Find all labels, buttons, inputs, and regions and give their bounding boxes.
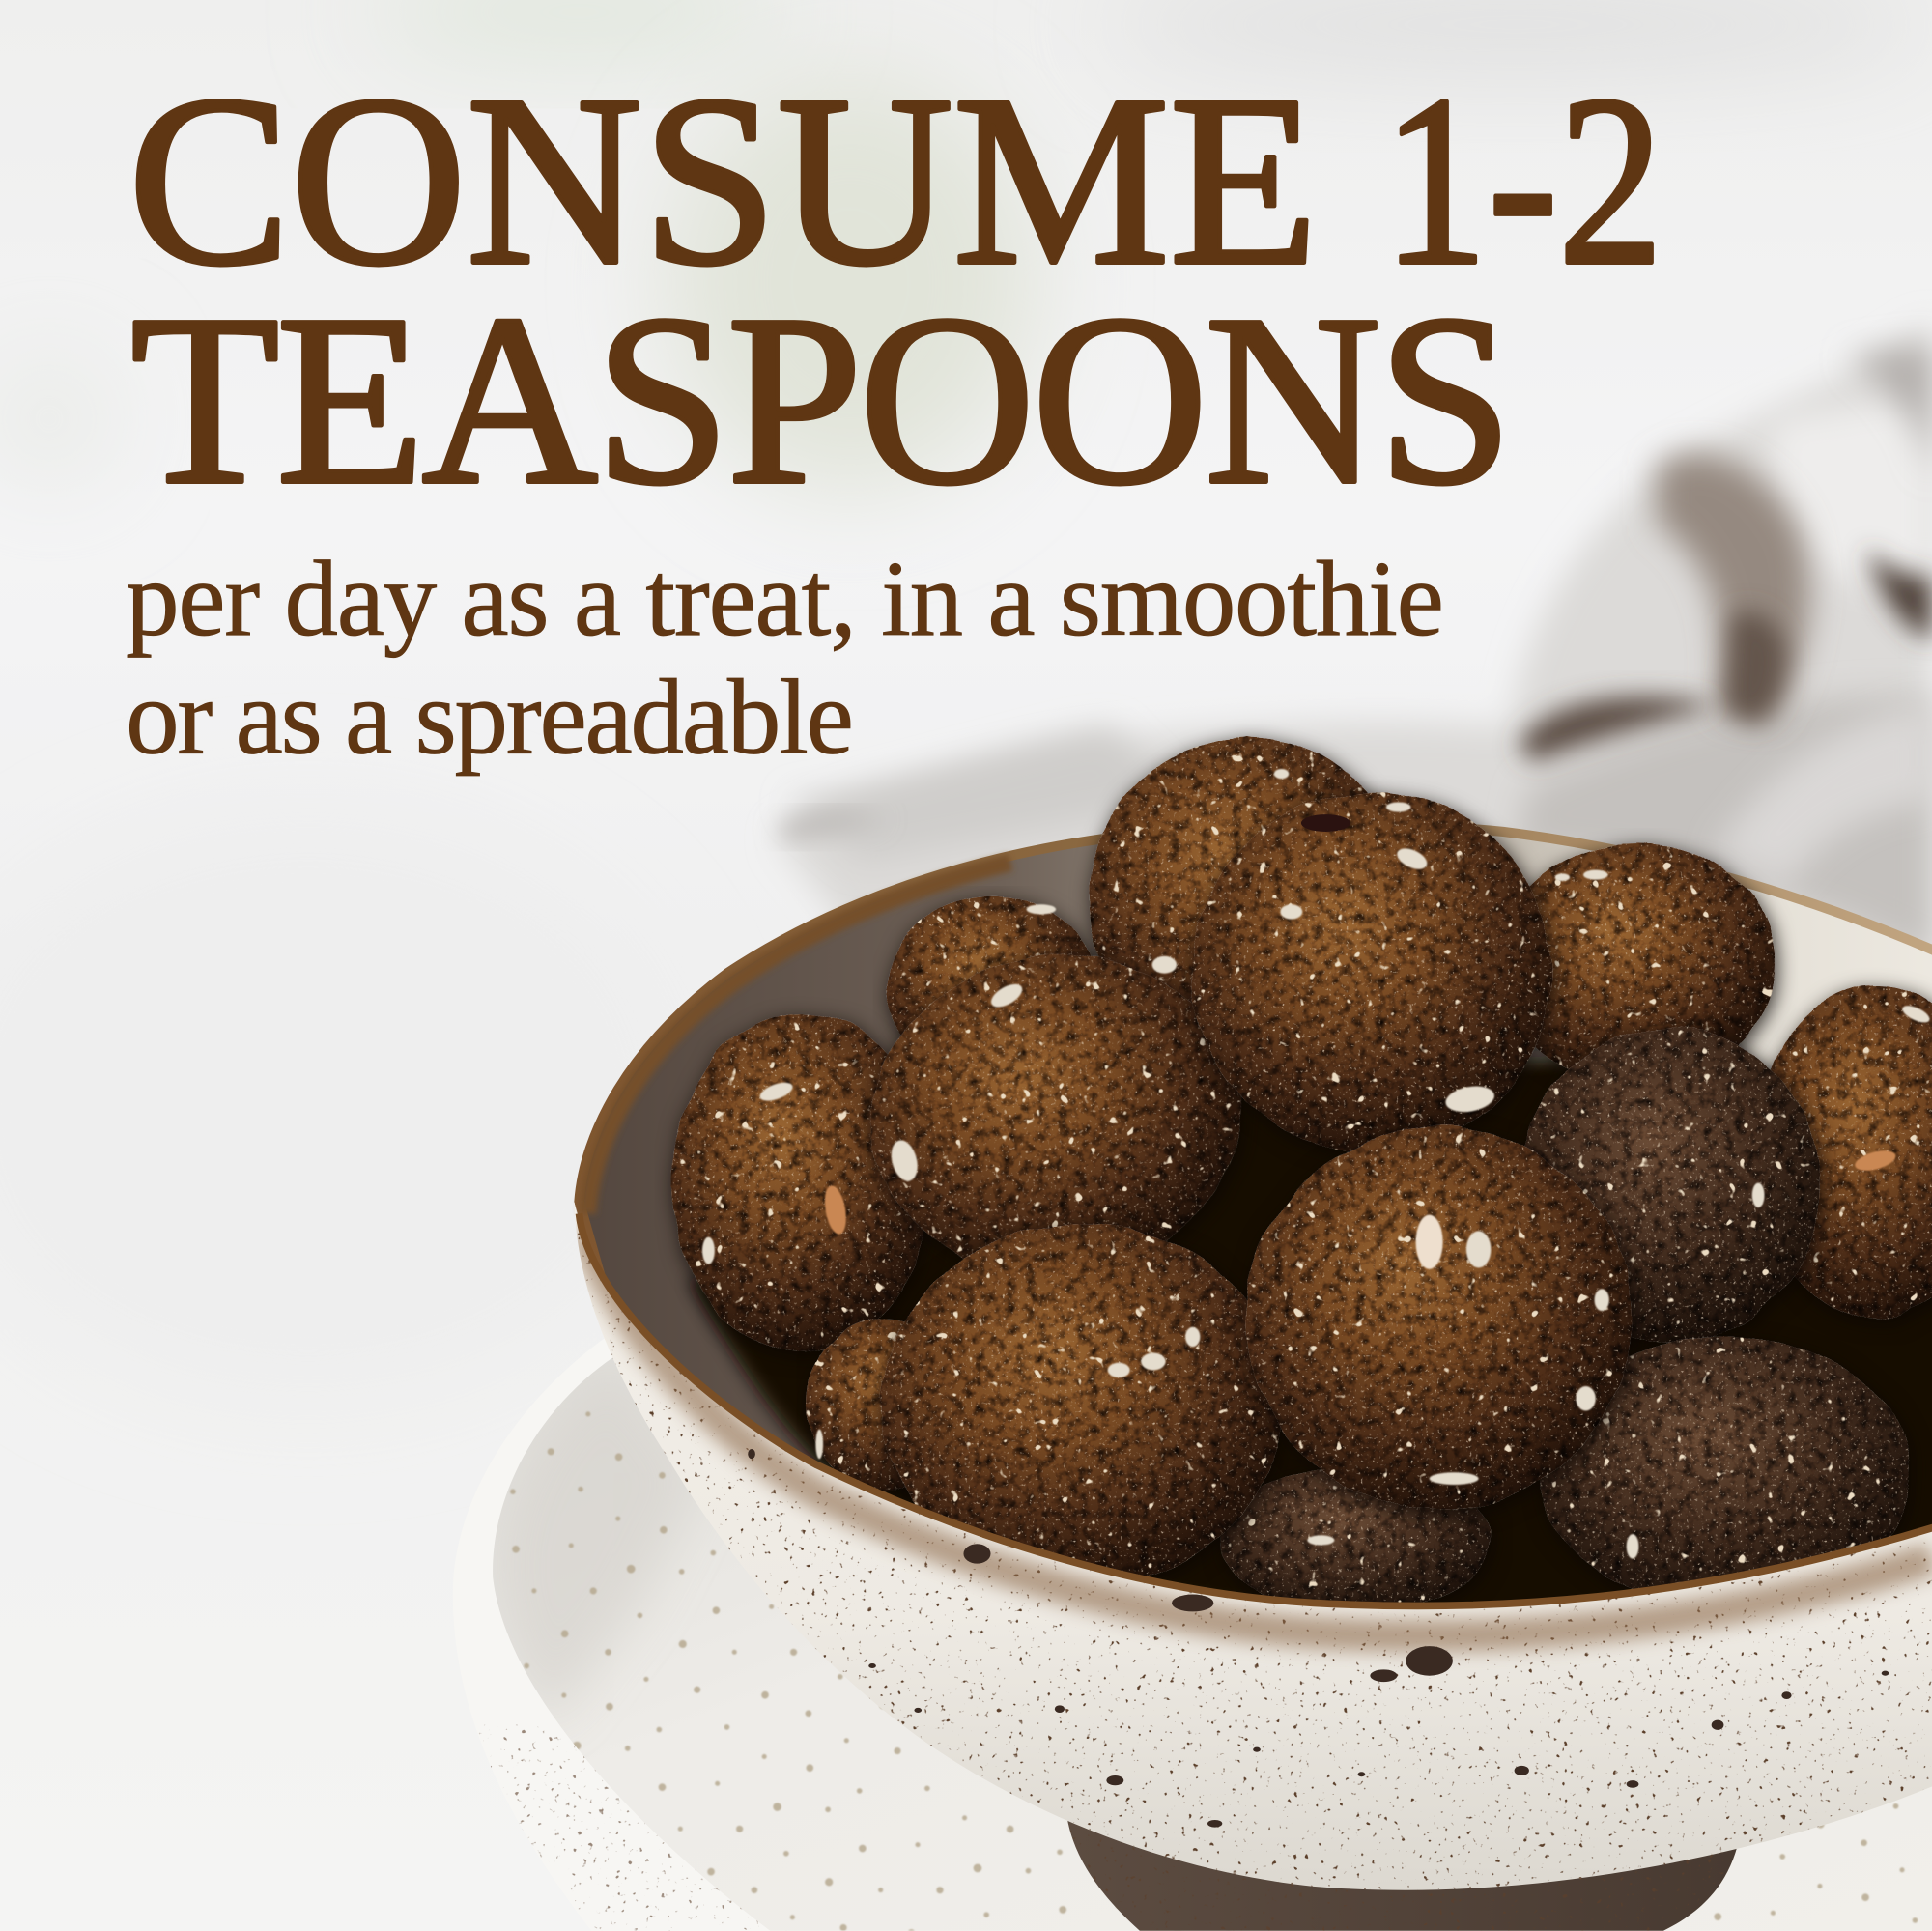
plate under the bowl [443,1331,1932,1931]
ball: small front left [807,1319,967,1491]
ball: front left [881,1224,1283,1586]
blurred grey towel [777,321,1932,974]
subtitle [126,540,1444,777]
bowl foot [1067,1820,1737,1931]
ball: far right [1756,985,1932,1319]
ball: right back [1497,842,1776,1084]
title line 1: 1-2 [1382,45,1663,316]
nut chips on the balls [702,769,1932,1559]
title [128,45,1663,535]
ball: right middle [1520,1028,1820,1343]
subtitle line 1: per day as a treat, in a smoothie [126,540,1444,659]
bowl interior [579,824,1932,1651]
ball: center [1246,1127,1633,1510]
ball: left [672,1012,929,1353]
bowl outer wall [567,1182,1932,1910]
ball: center left [851,932,1261,1298]
title line 2: TEASPOONS [130,265,1513,535]
ball: bottom middle [1220,1466,1491,1614]
dark seed on top ball [1301,814,1350,832]
brown glazed rim [579,1213,1932,1605]
ball: front top [1191,792,1551,1152]
shadow between the balls [690,1047,1932,1621]
ball: top back [1088,738,1406,1061]
subtitle line 2: or as a spreadable [126,658,854,777]
large dark glaze speckles [748,1449,1889,1828]
left rim glaze [587,863,1010,1213]
title line 1: CONSUME [128,45,1319,316]
ball: bottom right [1540,1337,1910,1608]
energy balls group [672,738,1932,1614]
ball: back left [887,895,1096,1076]
